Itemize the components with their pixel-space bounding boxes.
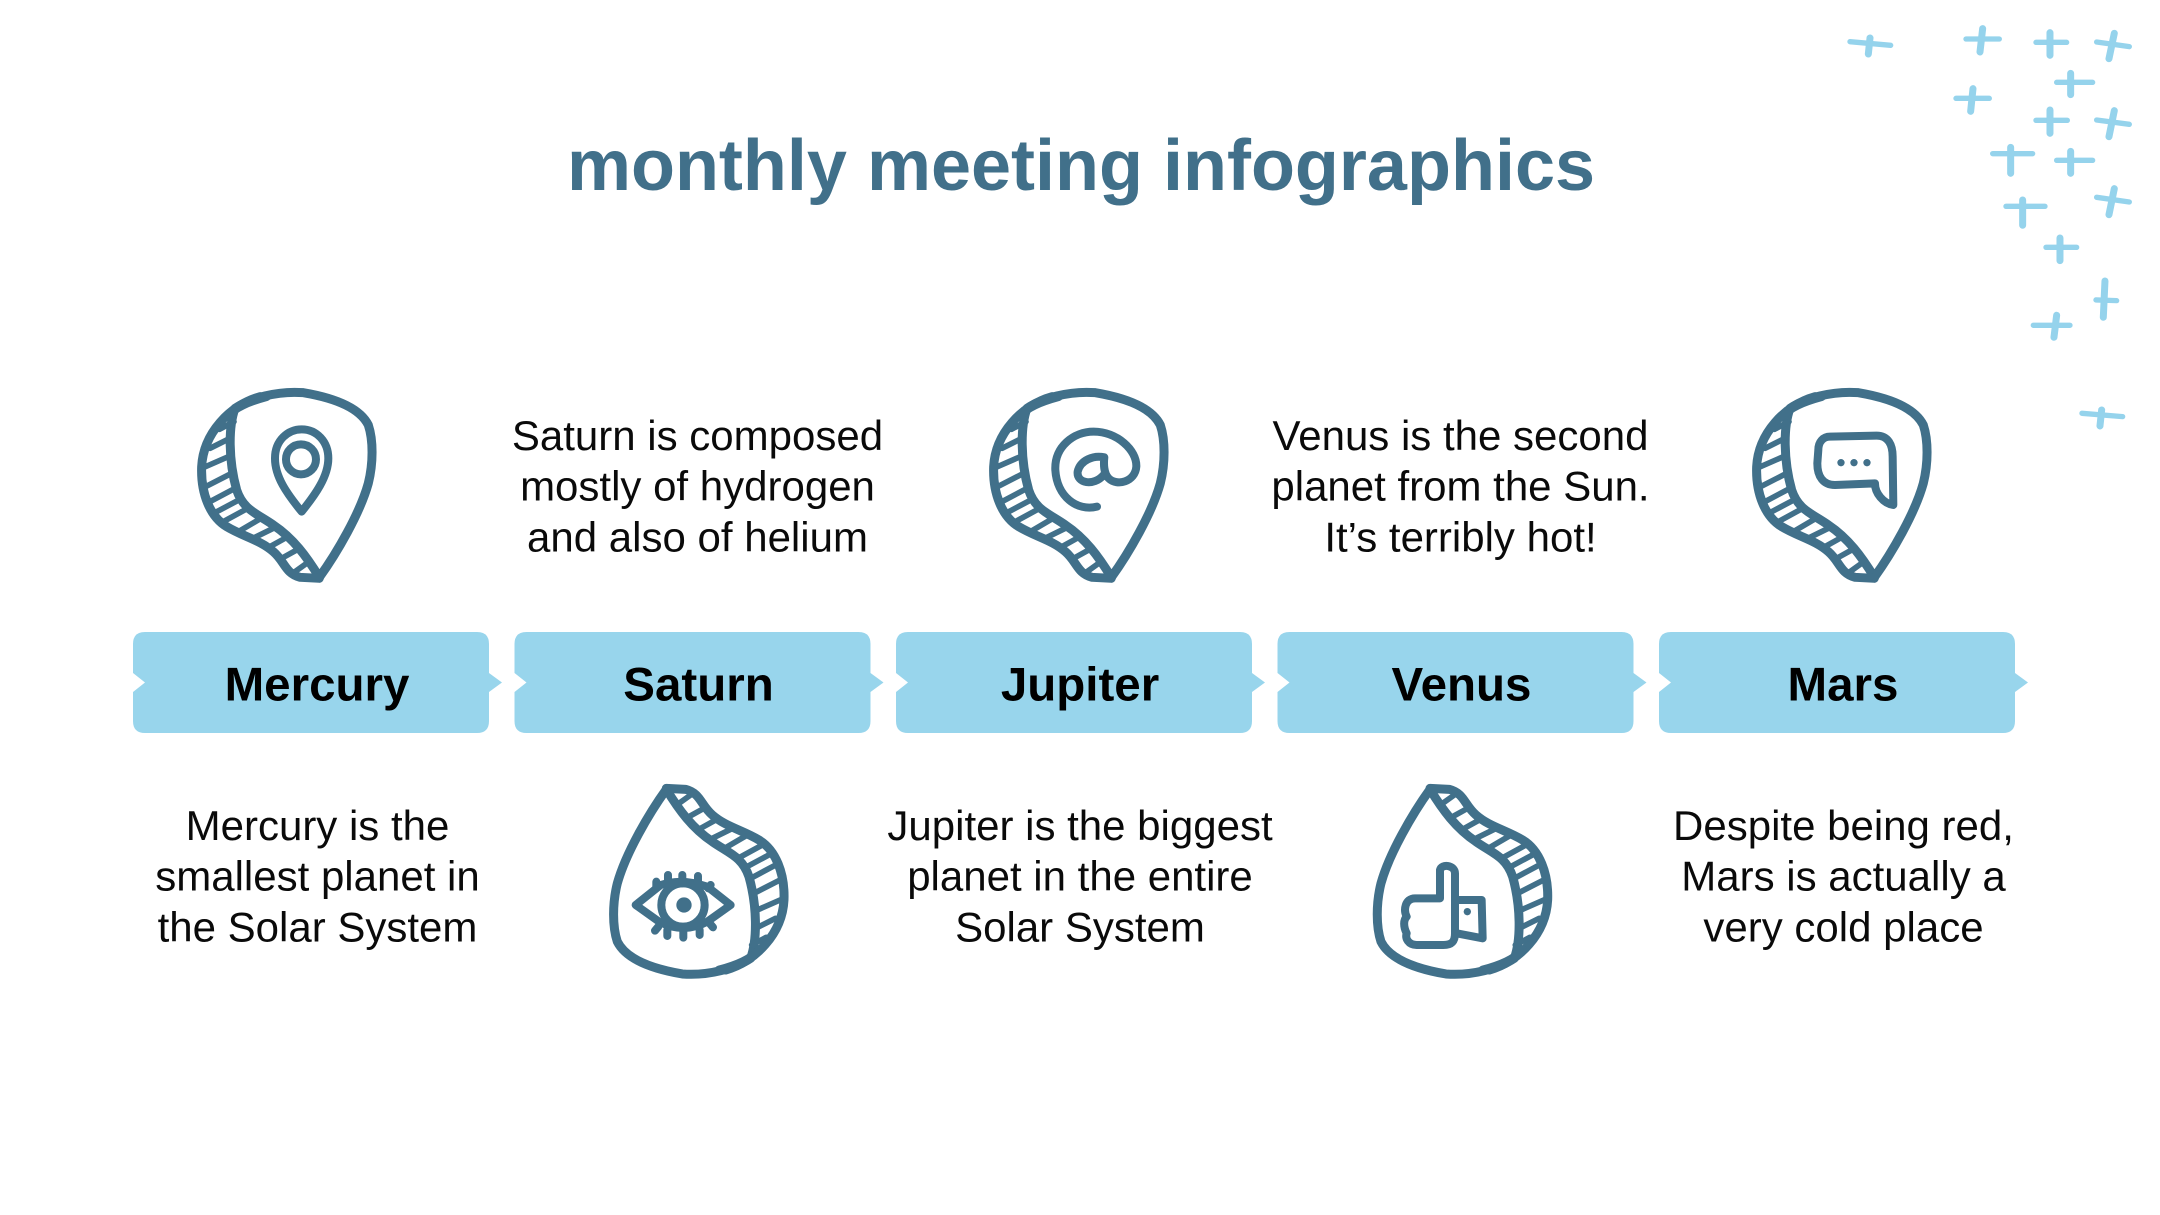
timeline bar: Jupiter: Jupiter <box>1001 658 1159 712</box>
timeline bar: Mercury <box>133 632 502 733</box>
text: Venus description: planet from the Sun. <box>1271 463 1650 510</box>
text: Saturn description: Saturn is composed <box>512 412 883 459</box>
icon: Mercury map pin <box>202 392 372 578</box>
timeline bar: Mars: Mars <box>1788 658 1898 712</box>
timeline bar: Saturn <box>514 632 884 733</box>
timeline bar: Venus: Venus <box>1392 658 1531 712</box>
timeline bar: Mercury: Mercury <box>225 658 410 712</box>
text: Mars description: very cold place <box>1703 903 1984 950</box>
text: Jupiter description: planet in the entire <box>907 853 1253 900</box>
text: Mercury description: smallest planet in <box>155 853 480 900</box>
text: Jupiter description: Solar System <box>955 903 1205 950</box>
icon: Jupiter at sign <box>994 392 1164 578</box>
timeline bar: Venus <box>1278 632 1646 733</box>
text: Saturn description: and also of helium <box>527 513 868 560</box>
timeline bar: Saturn: Saturn <box>623 658 774 712</box>
text: Venus description: Venus is the second <box>1273 412 1648 459</box>
text: Mars description: Despite being red, <box>1673 802 2014 849</box>
text: Saturn description: mostly of hydrogen <box>520 463 875 510</box>
text: Mars description: Mars is actually a <box>1681 853 2006 900</box>
text: Mercury description: the Solar System <box>158 903 477 950</box>
decorative crosses <box>1850 29 2129 426</box>
text: Jupiter description: Jupiter is the biggest <box>887 802 1273 849</box>
title: monthly meeting infographics <box>567 126 1595 206</box>
icon: Venus thumbs up <box>1377 788 1548 974</box>
icon: Saturn eye <box>614 788 784 974</box>
text: Venus description: It’s terribly hot! <box>1324 513 1597 560</box>
text: Mercury description: Mercury is the <box>186 802 449 849</box>
icon: Mars speech bubble <box>1757 392 1927 578</box>
timeline bar: Mars <box>1659 632 2028 733</box>
timeline bar: Jupiter <box>896 632 1265 733</box>
